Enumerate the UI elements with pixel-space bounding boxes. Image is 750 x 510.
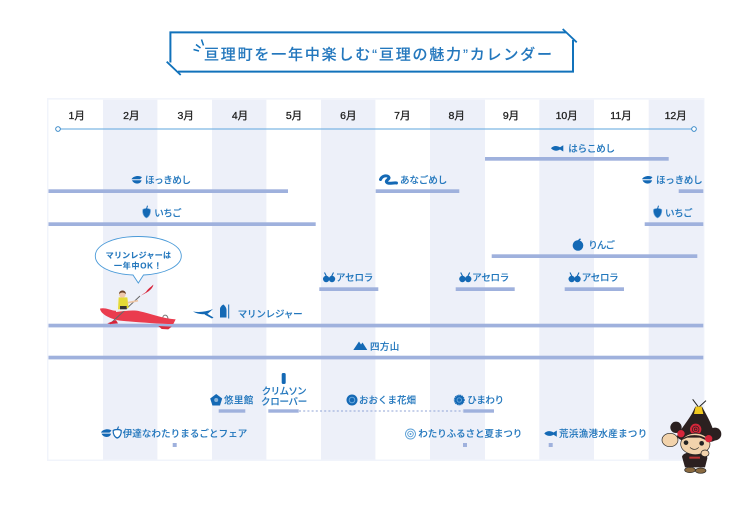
row: acerola 1: アセロラ (336, 273, 373, 284)
row: shihousan: 四方山 (370, 341, 399, 353)
month labels: 5月 (286, 110, 302, 122)
photo: kayaker illustration (100, 285, 176, 329)
month labels: 3月 (178, 110, 194, 122)
event: watari furusato summer festival: わたりふるさと夏まつり (418, 429, 522, 440)
row: ringo (492, 239, 697, 258)
row: ichigo left (48, 206, 316, 226)
month labels: 1月 (69, 110, 85, 122)
month labels: 11月 (610, 110, 632, 122)
row: marine leisure: マリンレジャー (238, 309, 303, 320)
title banner: 亘理町を一年中楽しむ“亘理の魅力”カレンダー (204, 46, 552, 64)
event: crimson clover: クリムソン (262, 387, 307, 398)
speech bubble (95, 236, 181, 283)
row: acerola 3: アセロラ (582, 273, 619, 284)
row: ichigo right (645, 206, 703, 226)
event: crimson clover (261, 373, 463, 413)
month labels: 6月 (340, 110, 356, 122)
row: marine leisure (48, 304, 703, 327)
speech bubble: マリンレジャーは (106, 251, 171, 260)
row: ichigo left: いちご (154, 207, 182, 219)
row: ichigo right: いちご (665, 207, 693, 219)
event: himawari (454, 395, 504, 413)
event: himawari: ひまわり (467, 396, 504, 406)
title banner (167, 29, 577, 75)
month labels: 12月 (665, 110, 687, 122)
row: shihousan (48, 341, 703, 359)
month labels: 2月 (123, 110, 139, 122)
row: hokki meshi left: ほっきめし (145, 176, 191, 187)
row: anago meshi (376, 175, 459, 193)
row: hokki meshi right: ほっきめし (656, 176, 703, 187)
calendar grid (47, 98, 704, 461)
month labels (69, 110, 687, 122)
row: harako meshi: はらこめし (568, 144, 615, 155)
event: arahama fishing port festival (544, 428, 647, 447)
month labels: 10月 (556, 110, 578, 122)
event: yuurikan: 悠里館 (224, 394, 254, 406)
row: acerola 2: アセロラ (472, 273, 509, 284)
month labels: 4月 (232, 110, 248, 122)
event: watari furusato summer festival (406, 429, 522, 447)
row: harako meshi (485, 144, 669, 161)
event: crimson clover: クローバー (261, 397, 307, 408)
event: date na watari marugoto fair (101, 426, 247, 447)
row: hokki meshi right (642, 176, 703, 193)
event: arahama fishing port festival: 荒浜漁港水産まつり (559, 428, 647, 440)
mascot character (662, 399, 721, 473)
timeline axis (56, 127, 696, 131)
event: ookuma flower field: おおくま花畑 (359, 394, 416, 406)
month labels: 7月 (394, 110, 410, 122)
row: acerola 3 (565, 272, 624, 291)
row: acerola 2 (456, 272, 515, 291)
month labels: 9月 (503, 110, 519, 122)
month labels: 8月 (449, 110, 465, 122)
speech bubble: 一年中OK！ (114, 260, 162, 270)
event: date na watari marugoto fair: 伊達なわたりまるごとフェア (123, 428, 247, 440)
row: hokki meshi left (48, 176, 288, 193)
event: yuurikan (210, 394, 254, 413)
row: ringo: りんご (588, 240, 615, 252)
row: anago meshi: あなごめし (400, 175, 447, 187)
row: acerola 1 (319, 272, 378, 291)
